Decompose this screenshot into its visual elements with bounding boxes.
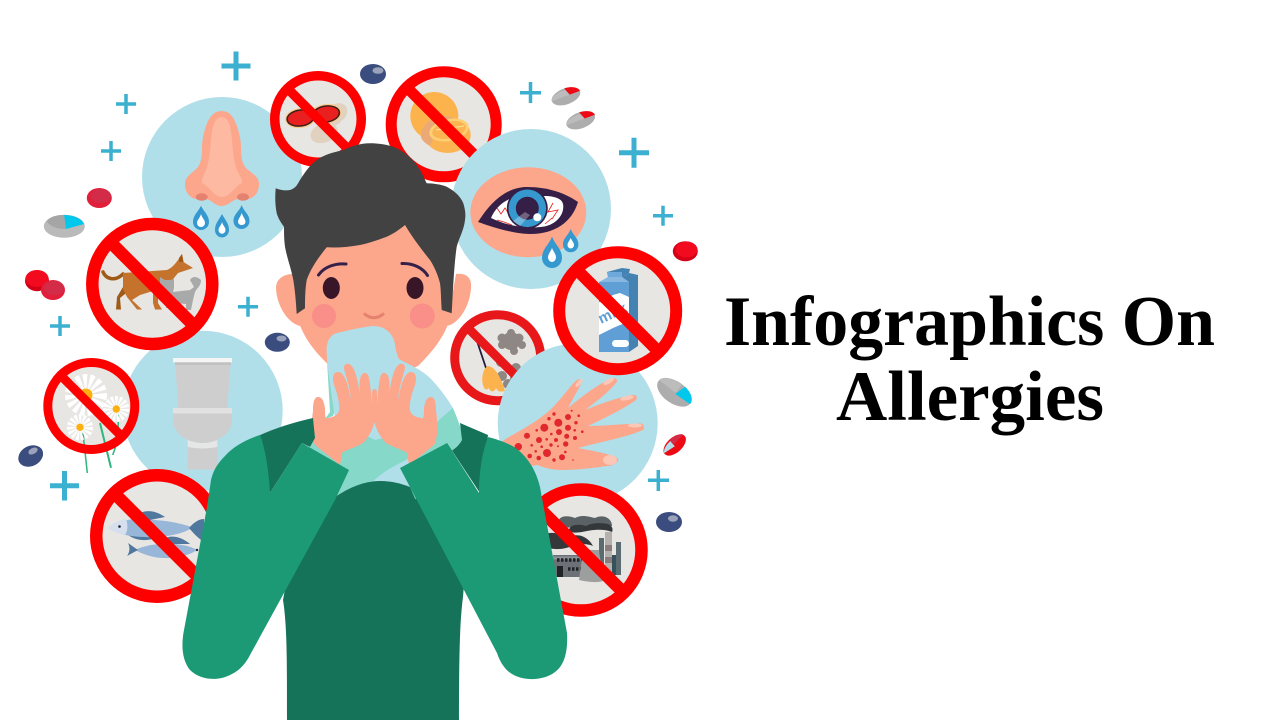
collar dark left [258,418,315,493]
icon: daisy centres [76,388,120,431]
left hand [312,364,376,465]
left sleeve [182,435,349,679]
panel: no citrus [391,72,496,177]
tissue [327,326,453,440]
milk label text: milk [596,299,630,328]
icon: hand [490,378,644,470]
icon: fingernails [574,377,642,465]
panel: no milk [559,252,676,369]
icon: tears [542,229,578,268]
panel: toilet [123,331,283,491]
panel: no pets [92,224,212,344]
icon: dog far leg [116,287,130,310]
icon: daisies [74,384,123,434]
right sleeve [400,437,567,679]
icon: dog [103,254,193,310]
right hand [373,364,437,465]
icon: nose [185,111,259,206]
panel: rash on hand [490,343,658,503]
icon: orange [410,92,471,153]
icon: peanut kernels [284,102,343,130]
ears [276,274,471,326]
collar dark right [447,423,488,493]
torso top re-drawn over scarf [330,481,420,510]
icon: rash spots [515,410,584,462]
scarf [310,360,462,500]
icon: factory smoke [546,516,613,549]
title [724,283,1215,436]
icon: nose drips [193,205,250,238]
panel: red eye [391,72,611,289]
icon: toilet [173,358,232,470]
panel: runny nose [142,97,302,257]
icon: flower stems [83,415,118,473]
face [296,215,455,378]
title: Infographics On [724,283,1215,361]
panel: no pollution [520,490,642,610]
hair [275,143,465,314]
eyebrows [318,263,428,276]
icon: eye [478,187,578,234]
icon: peanut shell [308,99,351,147]
icon: nostrils [196,193,249,201]
mouth [364,314,384,318]
torso [283,481,470,720]
eyes [323,277,424,299]
pills [15,64,698,532]
icon: factory [546,516,621,582]
panel: no peanuts [275,76,361,162]
icon: broom [473,330,505,392]
icon: skin around eye [470,167,586,257]
panel: no pollen flowers [48,362,135,473]
title: Allergies [836,358,1104,436]
cheeks [312,304,435,328]
icon: dust clouds [496,329,526,389]
icon: cat [160,277,201,310]
panel: no fish [96,475,218,597]
decorative plus signs [50,52,673,500]
icon: nose highlight [202,117,242,197]
icon: fish [108,511,204,558]
person sneezing [182,143,567,720]
panel: no dust [455,315,541,401]
